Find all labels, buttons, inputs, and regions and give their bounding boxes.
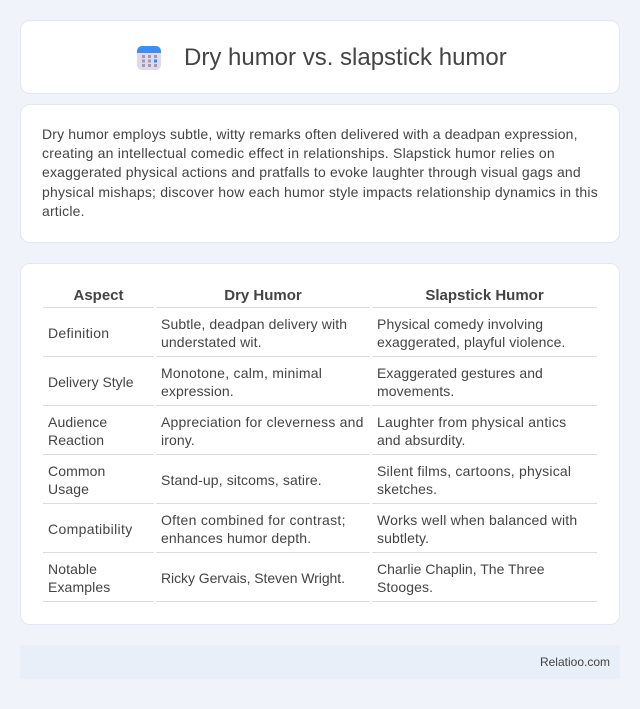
- comparison table panel: [20, 263, 620, 625]
- row: common usage: Common: [48, 463, 105, 479]
- row: delivery style: Monotone, calm, minimal: [161, 365, 322, 381]
- intro text: article.: [42, 203, 85, 219]
- row: audience reaction: Laughter from physical antics: [377, 414, 566, 430]
- row: compatibility: Works well when balanced with: [377, 512, 577, 528]
- row: common usage: Usage: [48, 481, 89, 497]
- intro text: creating an intellectual comedic effect in relationships. Slapstick humor relies on: [42, 145, 555, 161]
- row: delivery style: expression.: [161, 383, 234, 399]
- row: audience reaction: [48, 414, 566, 448]
- row: definition: [48, 316, 566, 350]
- row: definition: understated wit.: [161, 334, 262, 350]
- row: definition: Subtle, deadpan delivery with: [161, 316, 347, 332]
- row: compatibility: enhances humor depth.: [161, 530, 311, 546]
- row: notable examples: Ricky Gervais, Steven Wright.: [161, 570, 345, 586]
- row: definition: Definition: [48, 325, 109, 341]
- table header row: Dry Humor: [224, 287, 302, 304]
- intro text: [42, 126, 598, 219]
- row: delivery style: Delivery Style: [48, 374, 134, 390]
- footer bar: [20, 645, 620, 679]
- header panel: [20, 20, 620, 94]
- row: definition: Physical comedy involving: [377, 316, 543, 332]
- row: compatibility: Often combined for contrast;: [161, 512, 346, 528]
- row: common usage: Stand-up, sitcoms, satire.: [161, 472, 322, 488]
- row: definition: exaggerated, playful violence.: [377, 334, 566, 350]
- icon: calendar: [137, 46, 161, 70]
- row: notable examples: Examples: [48, 579, 110, 595]
- row: audience reaction: Reaction: [48, 432, 104, 448]
- row: common usage: Silent films, cartoons, physical: [377, 463, 571, 479]
- row: compatibility: Compatibility: [48, 521, 133, 537]
- intro text: exaggerated physical actions and pratfalls to evoke laughter through visual gags and: [42, 164, 581, 180]
- row: delivery style: Exaggerated gestures and: [377, 365, 543, 381]
- row: common usage: [48, 463, 571, 497]
- row: notable examples: Charlie Chaplin, The Three: [377, 561, 545, 577]
- footer brand: Relatioo.com: [540, 655, 610, 669]
- row: compatibility: subtlety.: [377, 530, 429, 546]
- intro panel: [20, 104, 620, 243]
- row: common usage: sketches.: [377, 481, 437, 497]
- row: audience reaction: Audience: [48, 414, 107, 430]
- row: audience reaction: Appreciation for cleverness and: [161, 414, 364, 430]
- row: audience reaction: and absurdity.: [377, 432, 465, 448]
- row: notable examples: Stooges.: [377, 579, 433, 595]
- row: delivery style: [48, 365, 543, 399]
- table header row: [73, 287, 544, 304]
- row: compatibility: [48, 512, 577, 546]
- row: delivery style: movements.: [377, 383, 454, 399]
- table header row: Slapstick Humor: [425, 287, 544, 304]
- intro text: physical mishaps; discover how each humor style impacts relationship dynamics in this: [42, 184, 598, 200]
- row: notable examples: [48, 561, 545, 595]
- row: notable examples: Notable: [48, 561, 97, 577]
- intro text: Dry humor employs subtle, witty remarks often delivered with a deadpan expression,: [42, 126, 578, 142]
- row: audience reaction: irony.: [161, 432, 195, 448]
- table header row: Aspect: [73, 287, 124, 304]
- title: Dry humor vs. slapstick humor: [184, 44, 507, 71]
